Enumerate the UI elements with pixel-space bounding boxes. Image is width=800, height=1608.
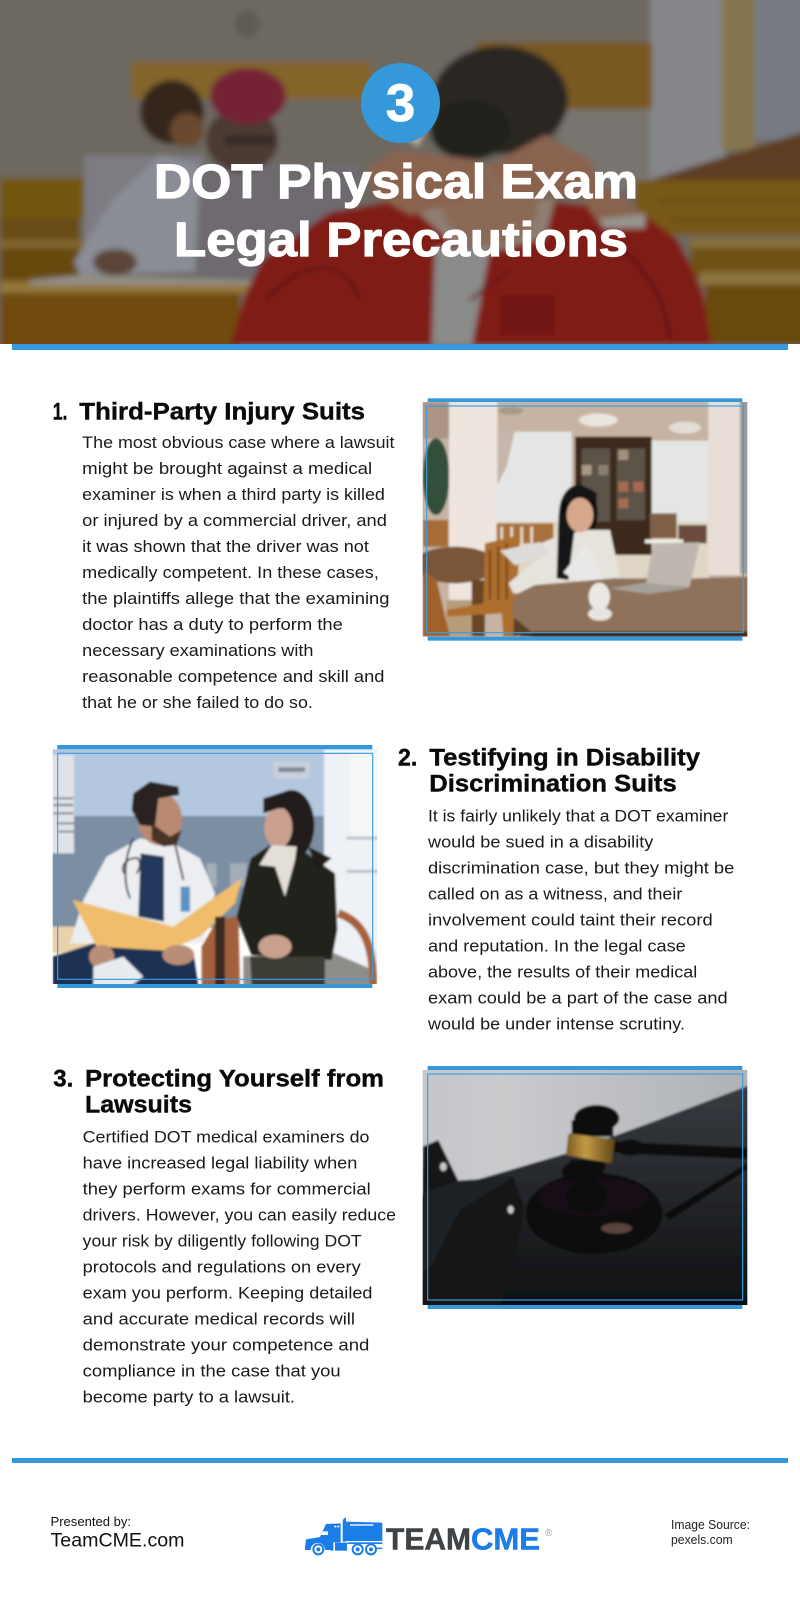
section 1: third-party injury suits bbox=[53, 398, 750, 712]
body text 3: demonstrate your competence and bbox=[83, 1335, 369, 1354]
body text 3: drivers. However, you can easily reduce bbox=[83, 1205, 396, 1224]
logo: TeamCME truck and wordmark bbox=[305, 1518, 553, 1557]
header banner bbox=[0, 0, 800, 353]
footer bbox=[50, 1514, 750, 1557]
presented by credit: Presented by: bbox=[50, 1514, 131, 1529]
body text 3: have increased legal liability when bbox=[83, 1153, 357, 1172]
body text 2: would be sued in a disability bbox=[427, 833, 654, 852]
body text 3: your risk by diligently following DOT bbox=[83, 1231, 362, 1250]
heading 3: Protecting Yourself from bbox=[85, 1066, 384, 1093]
body text 3: protocols and regulations on every bbox=[83, 1257, 361, 1276]
main title bbox=[154, 156, 638, 267]
section 2: testifying in disability discrimination suits bbox=[50, 745, 734, 1034]
body text 2: It is fairly unlikely that a DOT examiner bbox=[428, 807, 729, 826]
body text 1: doctor has a duty to perform the bbox=[82, 615, 343, 634]
body text 1: reasonable competence and skill and bbox=[82, 667, 384, 686]
wordmark: ® bbox=[545, 1528, 553, 1539]
body text 1: might be brought against a medical bbox=[82, 459, 372, 478]
body text 2: above, the results of their medical bbox=[428, 963, 697, 982]
header accent bar bbox=[12, 344, 788, 350]
body text 2: would be under intense scrutiny. bbox=[427, 1015, 685, 1034]
main title: Legal Precautions bbox=[174, 214, 628, 267]
image source credit: Image Source: bbox=[671, 1518, 750, 1532]
body text 2: involvement could taint their record bbox=[428, 911, 713, 930]
blue number badge: 3 bbox=[386, 74, 415, 133]
heading 3: 3. bbox=[53, 1066, 73, 1093]
body text 2 bbox=[427, 807, 734, 1034]
image source credit bbox=[671, 1518, 750, 1547]
body text 3: Certified DOT medical examiners do bbox=[83, 1127, 369, 1146]
photo 1: woman reading papers at a table bbox=[413, 398, 750, 641]
heading 1: 1. bbox=[53, 398, 67, 425]
heading 2: 2. bbox=[398, 745, 417, 772]
wordmark bbox=[386, 1523, 553, 1557]
body text 1: medically competent. In these cases, bbox=[82, 563, 379, 582]
body text 3: and accurate medical records will bbox=[83, 1309, 355, 1328]
body text 1: or injured by a commercial driver, and bbox=[82, 511, 387, 530]
body text 1: examiner is when a third party is killed bbox=[82, 485, 385, 504]
body text 2: and reputation. In the legal case bbox=[428, 937, 686, 956]
footer divider bar bbox=[12, 1458, 788, 1463]
body text 1: it was shown that the driver was not bbox=[82, 537, 369, 556]
photo 3: judge gavel on dark desk bbox=[420, 1066, 750, 1310]
presented by credit: TeamCME.com bbox=[50, 1530, 185, 1552]
body text 1 bbox=[82, 433, 395, 712]
photo 1 frame bbox=[427, 398, 743, 641]
heading 2: Discrimination Suits bbox=[429, 771, 677, 798]
heading 3 bbox=[53, 1066, 384, 1119]
heading 1: Third-Party Injury Suits bbox=[79, 398, 365, 425]
hero photo: students in lecture hall bbox=[0, 0, 800, 353]
body text 3: become party to a lawsuit. bbox=[83, 1387, 295, 1406]
heading 2 bbox=[398, 745, 700, 798]
main title: DOT Physical Exam bbox=[154, 156, 638, 209]
body text 1: that he or she failed to do so. bbox=[82, 693, 313, 712]
image source credit: pexels.com bbox=[671, 1533, 733, 1547]
photo 2 frame bbox=[57, 745, 373, 988]
body text 3: they perform exams for commercial bbox=[83, 1179, 371, 1198]
wordmark: TEAM bbox=[386, 1523, 471, 1557]
body text 1: The most obvious case where a lawsuit bbox=[82, 433, 395, 452]
body text 2: exam could be a part of the case and bbox=[428, 989, 728, 1008]
body text 3 bbox=[83, 1127, 396, 1406]
section 3: protecting yourself from lawsuits bbox=[53, 1066, 750, 1406]
heading 3: Lawsuits bbox=[85, 1092, 192, 1119]
body text 1: necessary examinations with bbox=[82, 641, 314, 660]
icon: truck bbox=[305, 1518, 382, 1555]
wordmark: CME bbox=[471, 1523, 540, 1557]
body text 3: exam you perform. Keeping detailed bbox=[83, 1283, 372, 1302]
body text 2: called on as a witness, and their bbox=[428, 885, 683, 904]
photo 3 frame bbox=[428, 1066, 743, 1309]
blue number badge bbox=[361, 63, 440, 143]
presented by credit bbox=[50, 1514, 185, 1552]
photo 2: doctor with patient and folder bbox=[50, 745, 381, 988]
heading 2: Testifying in Disability bbox=[429, 745, 700, 772]
body text 3: compliance in the case that you bbox=[83, 1361, 341, 1380]
body text 1: the plaintiffs allege that the examining bbox=[82, 589, 389, 608]
body text 2: discrimination case, but they might be bbox=[428, 859, 734, 878]
